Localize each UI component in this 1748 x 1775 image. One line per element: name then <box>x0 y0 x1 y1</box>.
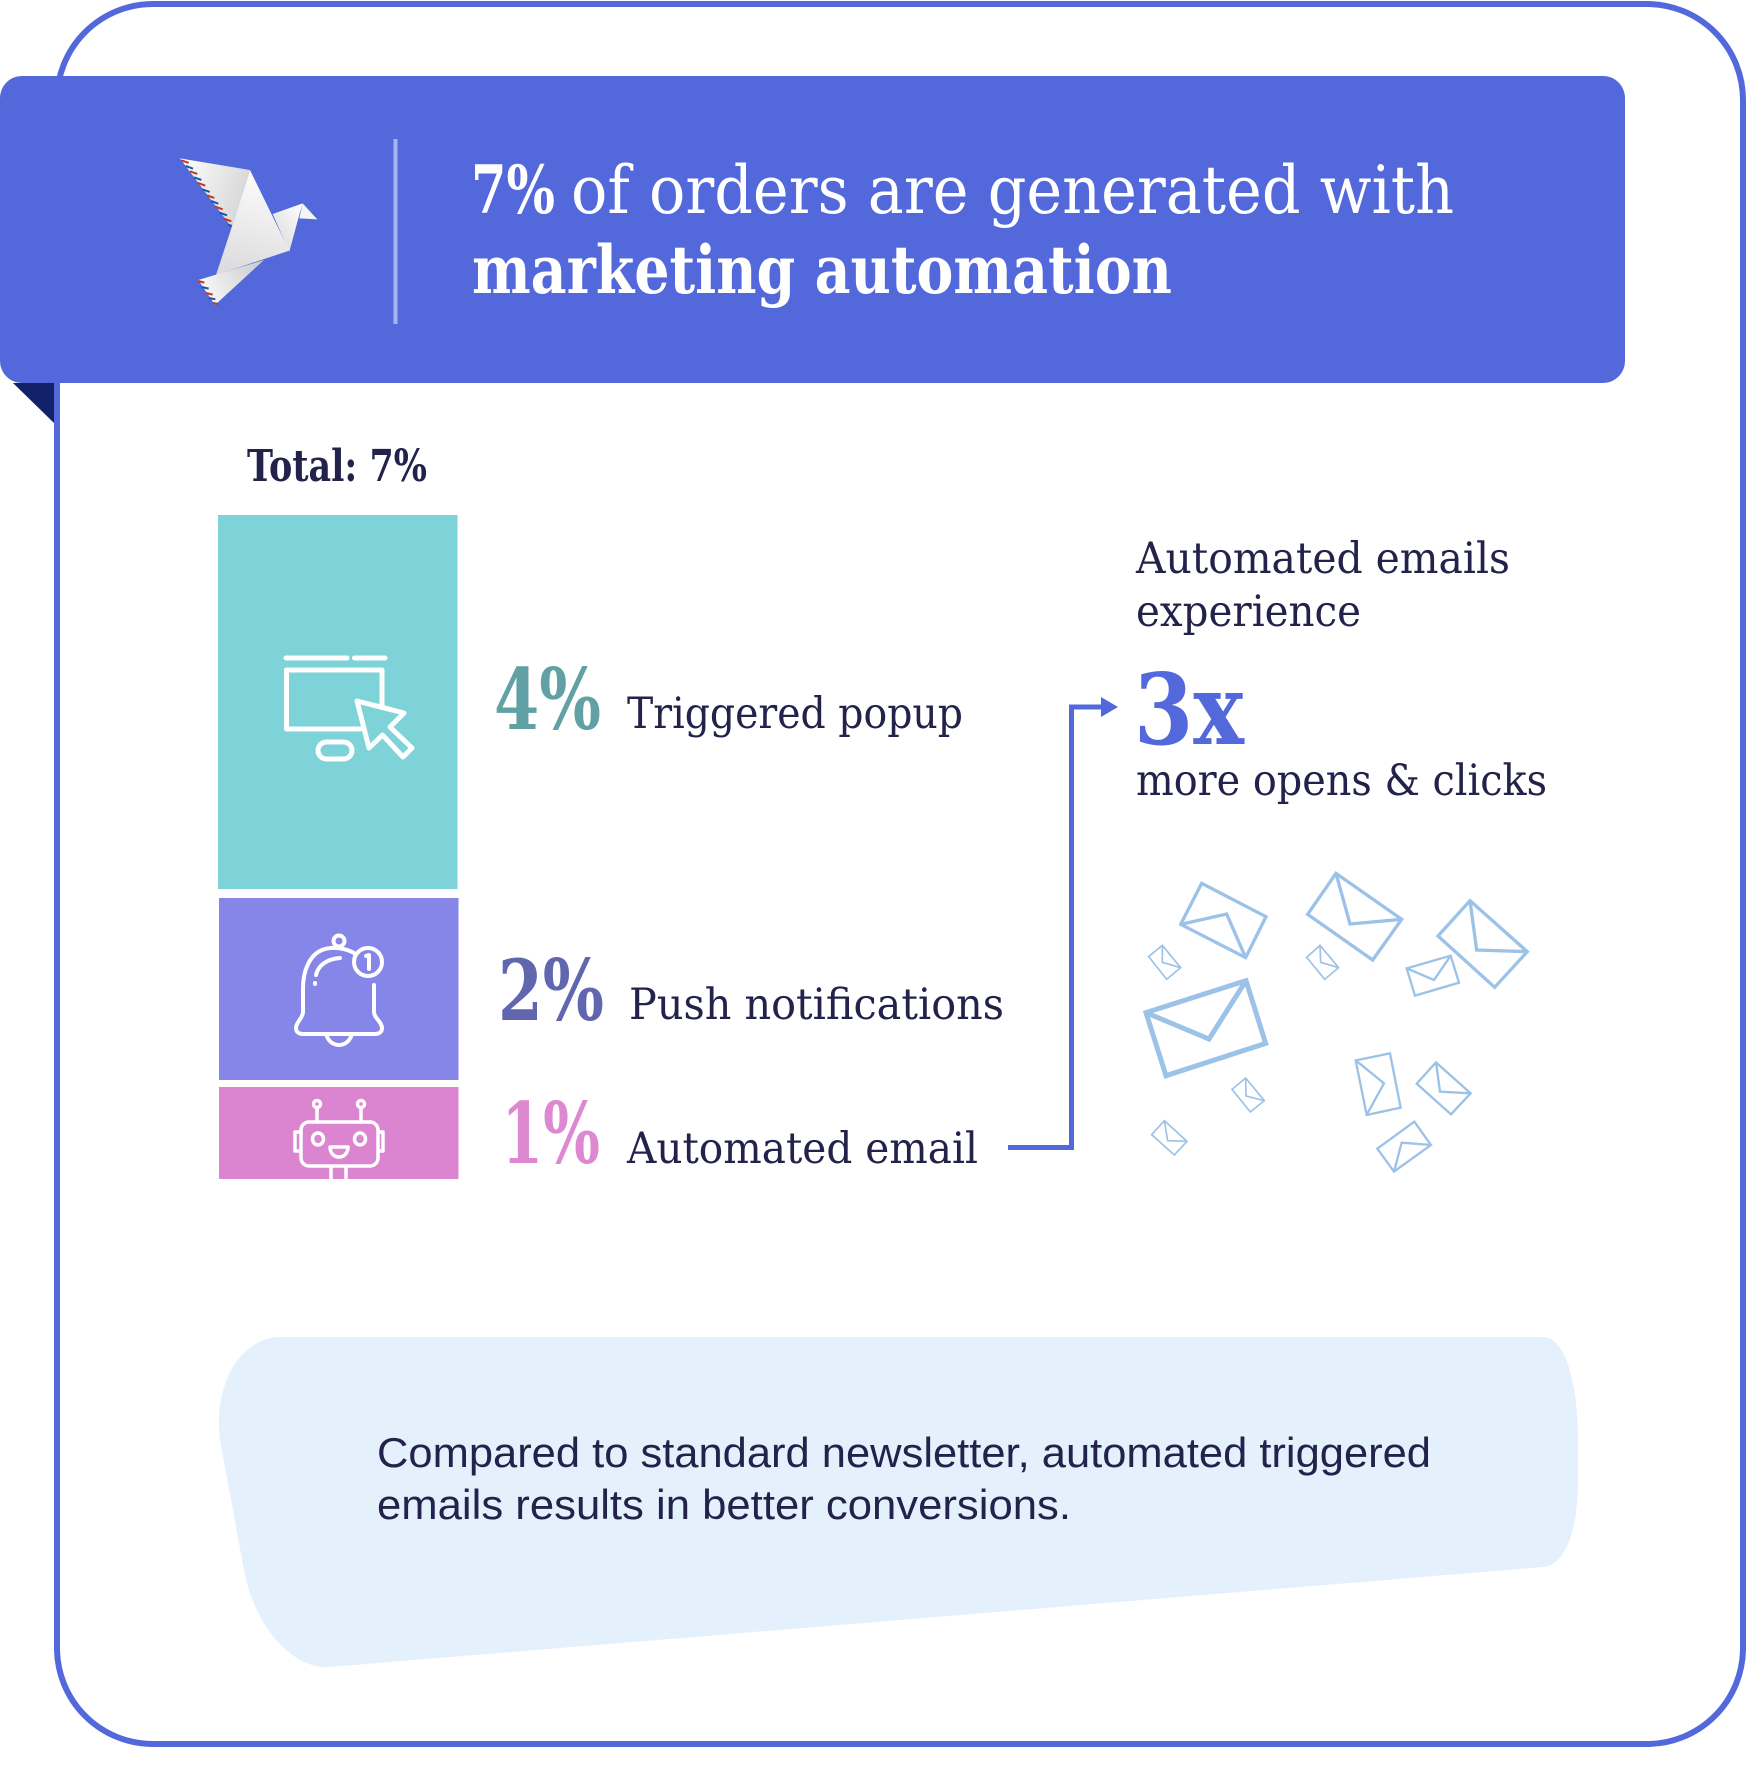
icon: robot <box>295 1100 383 1179</box>
bar segment: triggered popup <box>218 515 458 889</box>
stat: automated emails experience 3x: Automated emails <box>1135 534 1510 584</box>
stat: automated emails experience 3x: experience <box>1136 587 1361 637</box>
icon: origami paper bird <box>180 158 317 305</box>
title: marketing automation <box>472 231 1172 309</box>
label: 2% push notifications <box>498 941 1004 1040</box>
label: 4% triggered popup: 4% <box>494 650 601 749</box>
bar segment: automated email <box>219 1087 458 1179</box>
divider <box>394 139 398 324</box>
title: 7% <box>471 151 555 229</box>
label: 1% automated email <box>502 1084 978 1183</box>
label: 4% triggered popup: Triggered popup <box>627 689 963 739</box>
stacked bar total label: Total: 7% <box>247 441 427 492</box>
label: 1% automated email: Automated email <box>626 1124 978 1174</box>
stat: automated emails experience 3x <box>1134 534 1547 806</box>
title: of orders are generated with <box>571 152 1454 229</box>
callout: comparison note: Compared to standard newsletter, automated triggered <box>377 1429 1431 1476</box>
icon: flying envelopes <box>1146 873 1527 1172</box>
icon: bell with badge <box>296 936 382 1045</box>
callout: comparison note <box>219 1337 1578 1667</box>
stat: automated emails experience 3x: more opens & clicks <box>1136 756 1547 806</box>
title <box>471 151 1454 309</box>
label: 2% push notifications: Push notifications <box>629 980 1004 1030</box>
icon: popup window with cursor <box>286 658 412 759</box>
callout: comparison note: emails results in better conversions. <box>377 1481 1071 1528</box>
label: 4% triggered popup <box>494 650 963 749</box>
arrow: automated email to 3x stat <box>1008 697 1118 1148</box>
bar segment: push notifications <box>219 898 458 1080</box>
label: 1% automated email: 1% <box>502 1084 600 1183</box>
label: 2% push notifications: 2% <box>498 941 604 1040</box>
stat: automated emails experience 3x: 3x <box>1134 653 1245 768</box>
ribbon fold triangle <box>13 383 54 423</box>
header banner <box>0 76 1625 383</box>
